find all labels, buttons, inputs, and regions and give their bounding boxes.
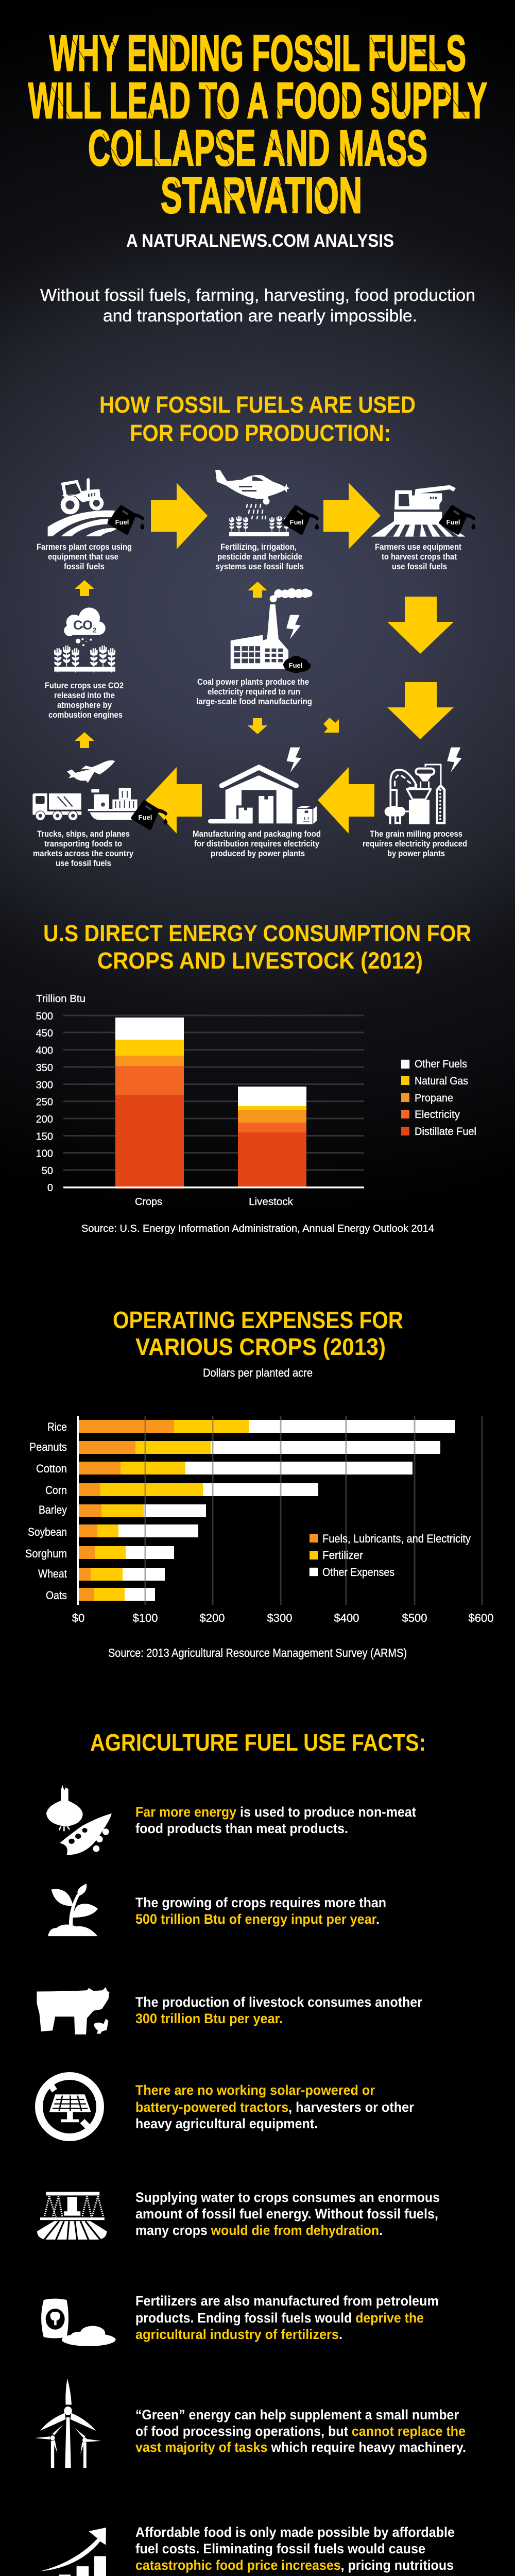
caption: fertilizing: pesticide and herbicide (217, 552, 302, 562)
caption: fertilizing: systems use fossil fuels (215, 562, 304, 571)
caption: milling: The grain milling process (370, 829, 462, 839)
heading: how fossil fuels are used: FOR FOOD PRODUCTION: (130, 420, 391, 446)
category labels: Crops (135, 1196, 162, 1208)
heading: direct energy consumption: CROPS AND LIVESTOCK (2012) (97, 947, 423, 974)
caption: coal plants: electricity required to run (208, 687, 300, 697)
legend (310, 1532, 471, 1579)
label: fuel on coal: Fuel (289, 662, 302, 669)
chart subtitle: Dollars per planted acre (203, 1366, 313, 1379)
arrow right 1 (151, 483, 208, 549)
icon: tractor on field (48, 478, 117, 536)
fact text: non-meat energy (135, 1804, 416, 1836)
icon: fuel can (282, 505, 319, 535)
icon: warehouse (208, 748, 317, 824)
x axis labels: $500 (402, 1612, 427, 1624)
category labels (25, 1420, 67, 1602)
caption: transport: markets across the country (33, 849, 134, 858)
title (28, 25, 487, 224)
flow diagram (32, 470, 475, 868)
caption: future crops: released into the (54, 691, 115, 700)
caption: planting (37, 543, 132, 571)
caption: future crops (45, 681, 124, 720)
icon: CO2 cloud and crops (54, 607, 115, 672)
legend: Other Expenses (322, 1566, 394, 1579)
x axis labels: $600 (469, 1612, 493, 1624)
icon: fuel can (131, 800, 167, 830)
stacked bar chart: energy consumption (36, 993, 476, 1208)
heading: direct energy consumption (43, 920, 471, 974)
legend: Distillate Fuel (415, 1126, 476, 1138)
caption: fertilizing (215, 543, 304, 571)
arrow up: to crops (75, 732, 94, 748)
fact text: non-meat energy: Far more energy is used to produce non-meat (135, 1804, 416, 1820)
caption: planting: equipment that use (48, 552, 118, 562)
x axis labels: $0 (72, 1612, 84, 1624)
icon: grain mill (385, 748, 462, 824)
x axis labels: $300 (267, 1612, 292, 1624)
bar: crops (115, 1018, 184, 1189)
x axis labels: $400 (334, 1612, 359, 1624)
horizontal stacked bar chart: operating expenses (25, 1416, 493, 1624)
caption: transport: Trucks, ships, and planes (37, 829, 130, 839)
caption: fertilizing: Fertilizing, irrigation, (220, 543, 297, 552)
icon: crop duster plane (215, 470, 289, 536)
x axis labels: $100 (133, 1612, 158, 1624)
fact text: fertilizers: products. Ending fossil fuels would deprive the (135, 2310, 424, 2326)
title: STARVATION (161, 167, 362, 224)
category labels: Oats (46, 1589, 67, 1602)
heading: how fossil fuels are used (99, 392, 416, 446)
fact text: water: Supplying water to crops consumes an enormous (135, 2190, 440, 2205)
icon: combine harvester (371, 485, 465, 537)
x axis labels: $200 (200, 1612, 225, 1624)
icon: wind turbines (35, 2378, 101, 2468)
icon: irrigation machine (37, 2192, 107, 2240)
y axis labels: 450 (36, 1028, 53, 1039)
bar: livestock (238, 1087, 306, 1187)
arrow left 1 (318, 767, 374, 834)
y axis labels: 100 (36, 1148, 53, 1160)
arrow up: to planting (75, 580, 94, 596)
caption: coal plants: large-scale food manufacturing (196, 697, 312, 706)
fact text: crops energy (135, 1895, 386, 1927)
caption: future crops: atmosphere by (57, 701, 112, 710)
caption: transport: use fossil fuels (56, 859, 111, 868)
caption: milling (363, 829, 467, 858)
category labels: Rice (47, 1420, 67, 1433)
caption: manufacturing: produced by power plants (211, 849, 305, 858)
category labels: Peanuts (29, 1440, 67, 1453)
caption: coal plants (196, 677, 312, 706)
caption: transport: transporting foods to (44, 839, 122, 849)
caption: manufacturing: for distribution requires electricity (194, 839, 320, 849)
caption: milling: requires electricity produced (363, 839, 467, 849)
caption: harvest (375, 543, 461, 571)
caption: transport (33, 829, 134, 868)
fact text: livestock energy (135, 1994, 422, 2026)
y axis labels: 300 (36, 1080, 53, 1091)
caption: coal plants: Coal power plants produce the (197, 677, 309, 687)
caption: milling: by power plants (387, 849, 445, 858)
heading: operating expenses: OPERATING EXPENSES FOR (113, 1307, 403, 1333)
caption: future crops: combustion engines (48, 710, 123, 720)
icon: onion and pea pod (46, 1785, 112, 1855)
fact text: green energy: “Green” energy can help supplement a small number (135, 2407, 459, 2422)
fact text: green energy (135, 2407, 466, 2455)
fact text: fertilizers (135, 2293, 439, 2342)
category labels: Cotton (36, 1462, 67, 1475)
caption: future crops: Future crops use CO2 (45, 681, 124, 690)
y axis labels: 150 (36, 1131, 53, 1143)
icon: fuel can: Fuel (139, 814, 152, 821)
legend: Other Fuels (415, 1058, 467, 1070)
y axis labels: 400 (36, 1045, 53, 1057)
caption: planting: fossil fuels (64, 562, 105, 571)
source note: Source: 2013 Agricultural Resource Management Survey (ARMS) (108, 1646, 407, 1659)
heading: operating expenses: VARIOUS CROPS (2013) (135, 1333, 386, 1360)
legend: Electricity (415, 1109, 460, 1121)
icon: CO2 cloud and crops: CO (73, 618, 93, 633)
fact text: no solar tractors (135, 2082, 414, 2131)
caption: harvest: Farmers use equipment (375, 543, 461, 552)
intro text: Without fossil fuels, farming, harvesting, food production (40, 285, 475, 304)
legend: Fuels, Lubricants, and Electricity (322, 1532, 471, 1545)
icon: fertilizer bag and pile (41, 2299, 116, 2346)
caption: manufacturing (193, 829, 321, 858)
icon: cow and chicken (37, 1987, 109, 2035)
legend: Natural Gas (415, 1075, 468, 1087)
arrow down 1 (387, 597, 454, 654)
category labels (135, 1196, 294, 1208)
bars (78, 1420, 455, 1601)
fact text: crops energy: 500 trillion Btu of energy input per year. (135, 1911, 380, 1927)
fact text: no solar tractors: battery-powered tractors, harvesters or other (135, 2099, 414, 2115)
arrow down 2 (387, 682, 454, 739)
arrow down: to manufacturing (248, 718, 267, 734)
arrow right 2 (323, 483, 381, 549)
fact text: green energy: vast majority of tasks which require heavy machinery. (135, 2439, 466, 2455)
icon: rising price chart (40, 2528, 106, 2576)
icon: no solar panels (39, 2076, 100, 2137)
icon: CO2 cloud and crops: 2 (93, 626, 96, 634)
axis title: Trillion Btu (36, 993, 85, 1005)
fact text: no solar tractors: There are no working solar-powered or (135, 2082, 375, 2098)
fact text: crops energy: The growing of crops requires more than (135, 1895, 386, 1910)
icon: fuel can: Fuel (290, 518, 303, 526)
caption: harvest: to harvest crops that (382, 552, 457, 562)
fact text: prices (135, 2524, 461, 2576)
intro text: and transportation are nearly impossible. (103, 306, 417, 325)
legend: Fertilizer (322, 1549, 363, 1562)
icon: coal power plant (231, 588, 313, 673)
caption: harvest: use fossil fuels (392, 562, 447, 571)
fact text: prices: catastrophic food price increases, pricing nutritious (135, 2557, 454, 2573)
top gradient background (0, 0, 515, 1283)
caption: manufacturing: Manufacturing and packaging food (193, 829, 321, 839)
heading: fuel use facts: AGRICULTURE FUEL USE FACTS: (90, 1729, 426, 1756)
y axis labels (36, 1011, 53, 1194)
fact text: livestock energy: The production of livestock consumes another (135, 1994, 422, 2010)
fact text: prices: Affordable food is only made possible by affordable (135, 2524, 455, 2540)
fact text: non-meat energy: food products than meat products. (135, 1821, 348, 1836)
y axis labels: 500 (36, 1011, 53, 1022)
legend: Propane (415, 1092, 453, 1104)
y axis labels: 200 (36, 1114, 53, 1125)
heading: direct energy consumption: U.S DIRECT ENERGY CONSUMPTION FOR (43, 920, 471, 946)
fact text: no solar tractors: heavy agricultural equipment. (135, 2116, 318, 2131)
arrow left 2 (146, 767, 202, 834)
fact text: water: many crops would die from dehydration. (135, 2223, 383, 2238)
x axis labels (72, 1612, 493, 1624)
y axis labels: 350 (36, 1062, 53, 1074)
arrow diagonal: to milling (323, 718, 339, 733)
category labels: Sorghum (25, 1547, 67, 1560)
fact text: fertilizers: Fertilizers are also manufactured from petroleum (135, 2293, 439, 2309)
heading: operating expenses (113, 1307, 403, 1360)
category labels: Livestock (249, 1196, 294, 1208)
fact text: prices: fuel costs. Eliminating fossil fuels would cause (135, 2541, 425, 2556)
arrow up: to fertilizing (248, 582, 267, 598)
icon: truck, ship and plane (32, 760, 138, 821)
icon: fuel can: Fuel (447, 518, 460, 526)
icon: fuel can (108, 505, 144, 535)
y axis labels: 250 (36, 1097, 53, 1108)
heading: how fossil fuels are used: HOW FOSSIL FUELS ARE USED (99, 392, 416, 418)
category labels: Corn (45, 1484, 67, 1497)
intro text (40, 285, 475, 325)
category labels: Soybean (28, 1526, 67, 1538)
fact text: water: amount of fossil fuel energy. Without fossil fuels, (135, 2206, 438, 2222)
y axis labels: 50 (42, 1165, 53, 1177)
fact text: fertilizers: agricultural industry of fertilizers. (135, 2327, 342, 2342)
icon: fuel can (439, 505, 475, 535)
category labels: Barley (39, 1503, 67, 1516)
subtitle: A NATURALNEWS.COM ANALYSIS (126, 231, 394, 251)
fact text: livestock energy: 300 trillion Btu per year. (135, 2011, 283, 2026)
category labels: Wheat (38, 1567, 67, 1580)
icon: fuel can: Fuel (115, 518, 129, 526)
fact text: green energy: of food processing operations, but cannot replace the (135, 2424, 466, 2439)
icon: sprouting plant (48, 1884, 98, 1936)
caption: planting: Farmers plant crops using (37, 543, 132, 552)
y axis labels: 0 (47, 1182, 53, 1194)
source note: Source: U.S. Energy Information Administration, Annual Energy Outlook 2014 (81, 1223, 434, 1234)
legend (401, 1058, 476, 1138)
fact text: water (135, 2190, 440, 2238)
